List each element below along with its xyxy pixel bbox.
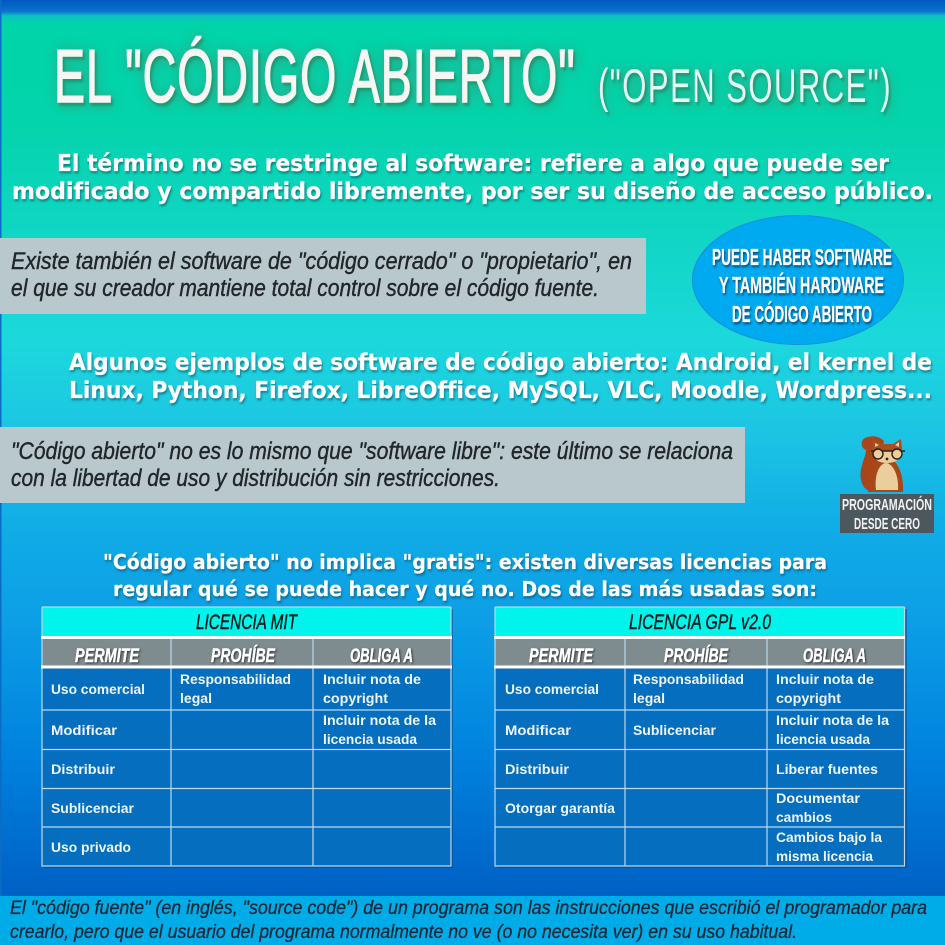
MIT rows: Incluir nota de [323,672,422,687]
MIT title bar: LICENCIA MIT [196,611,299,634]
licences intro text: "Código abierto" no implica "gratis": existen diversas licencias para [103,550,827,574]
GPL rows: Cambios bajo la [776,830,882,845]
GPL rows: Sublicenciar [633,723,717,738]
GPL rows: Modificar [505,723,572,738]
GPL rows: Documentar [776,791,861,806]
intro text: El término no se restringe al software: refiere a algo que puede ser [57,151,890,177]
MIT rows: Uso comercial [51,682,145,697]
GPL rows: Otorgar garantía [505,801,616,816]
panel: closed source: Existe también el software de "código cerrado" o "propietario", en [11,248,632,275]
examples text [69,350,932,404]
panel: free software: con la libertad de uso y distribución sin restricciones. [11,465,500,492]
title [54,36,891,119]
GPL rows: Incluir nota de [776,672,875,687]
MIT column headers: PERMITE [75,646,140,667]
title: EL "CÓDIGO ABIERTO" [54,36,575,119]
GPL rows: misma licencia [776,849,873,864]
panel: free software [0,427,745,503]
MIT rows: licencia usada [323,732,417,747]
GPL title bar [495,607,904,637]
MIT rows: Incluir nota de la [323,713,437,728]
MIT column headers: PROHÍBE [211,645,276,667]
GPL rows: Liberar fuentes [776,762,878,777]
MIT rows: Modificar [51,723,118,738]
GPL rows: Distribuir [505,762,570,777]
callout: hardware ellipse [692,216,904,344]
MIT rows [51,672,437,855]
licences intro text: regular qué se puede hacer y qué no. Dos de las más usadas son: [113,577,817,601]
intro text: modificado y compartido libremente, por ser su diseño de acceso público. [12,179,933,205]
MIT rows: Responsabilidad [180,672,291,687]
GPL column headers: PROHÍBE [664,645,729,667]
MIT rows: Distribuir [51,762,116,777]
MIT rows: Sublicenciar [51,801,135,816]
footer note: crearlo, pero que el usuario del programa normalmente no ve (o no necesita ver) en su uso habitual. [10,922,797,943]
GPL rows: Responsabilidad [633,672,744,687]
GPL title bar: LICENCIA GPL v2.0 [629,611,771,634]
subtitle: open source: ("OPEN SOURCE") [598,61,891,113]
intro text [12,151,933,205]
GPL column headers [495,639,904,667]
GPL rows [505,672,890,864]
MIT rows: legal [180,691,212,706]
GPL column headers: PERMITE [529,646,594,667]
GPL rows: cambios [776,810,832,825]
MIT rows: Uso privado [51,840,131,855]
table: GPL v2.0 licence [494,607,907,868]
GPL rows: legal [633,691,665,706]
GPL rows: Uso comercial [505,682,599,697]
panel: closed source: el que su creador mantiene total control sobre el código fuente. [11,275,599,302]
MIT column headers: OBLIGA A [350,646,413,667]
GPL rows: licencia usada [776,732,870,747]
footer note [0,896,945,945]
panel: closed source [0,238,646,314]
MIT title bar [42,607,451,637]
icon: squirrel logo [840,436,934,533]
MIT column headers [42,639,451,667]
panel: free software: "Código abierto" no es lo mismo que "software libre": este último se relaciona [11,438,733,465]
MIT rows: copyright [323,691,389,706]
licences intro text [103,550,827,601]
GPL rows: copyright [776,691,842,706]
GPL column headers: OBLIGA A [803,646,866,667]
table: MIT licence [41,607,453,868]
GPL rows: Incluir nota de la [776,713,890,728]
logo label [840,494,934,533]
